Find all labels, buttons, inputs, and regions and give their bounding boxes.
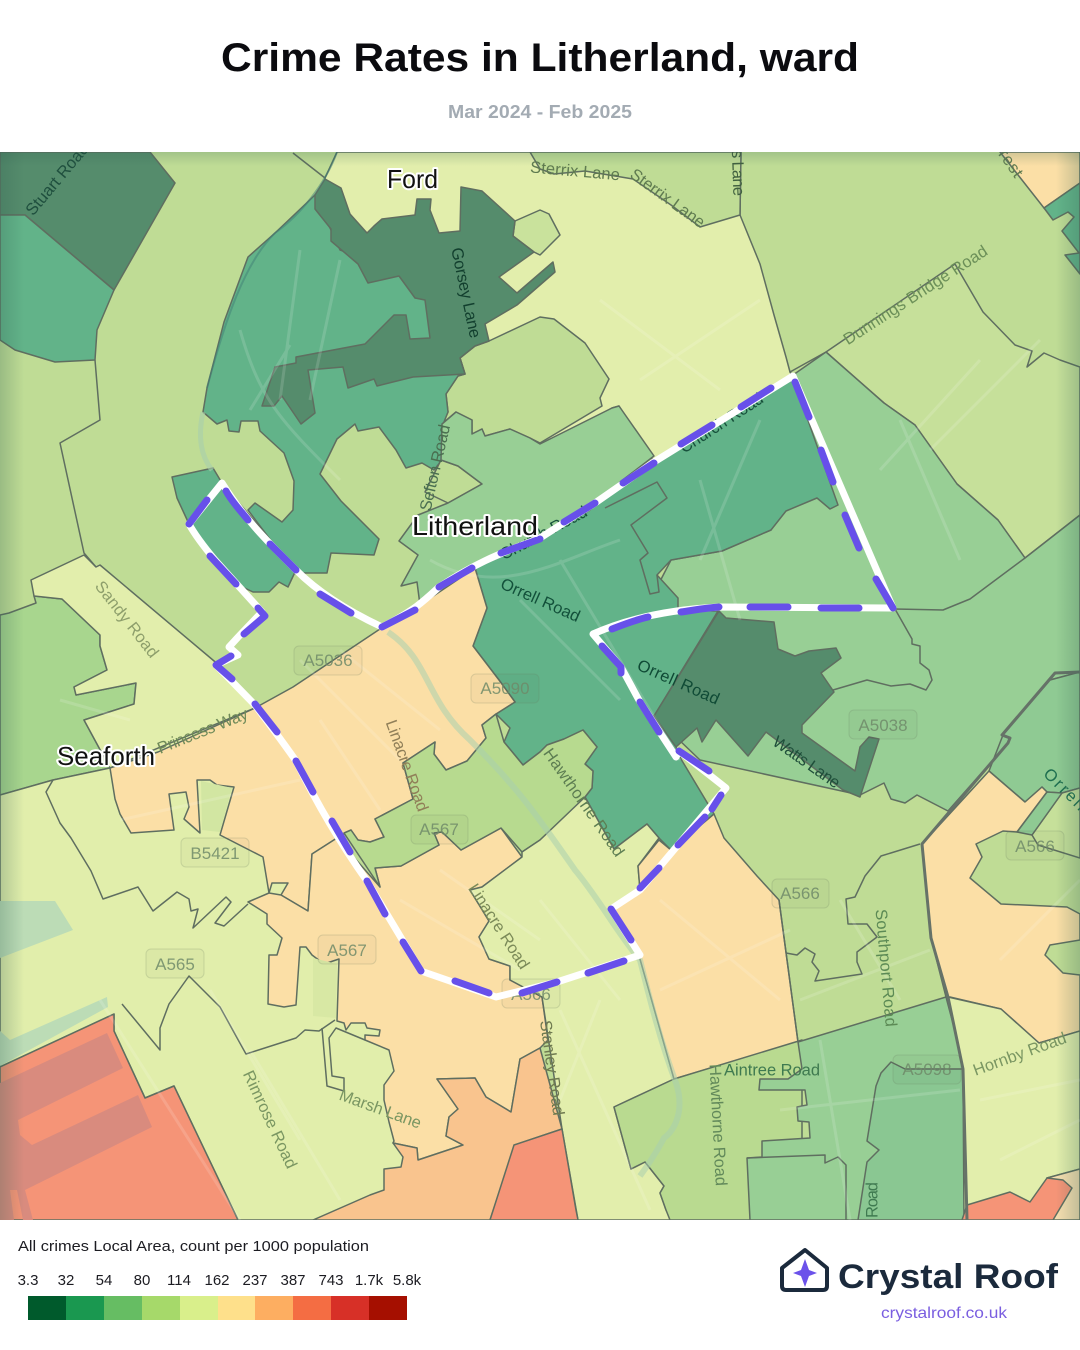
legend values: 1.7k [355,1272,384,1289]
region: top-left dark green [0,152,175,290]
place label: Ford: Ford [387,164,438,194]
road shields: A567 [419,820,459,839]
road labels: Road [863,1182,881,1218]
road shields: A566 [511,985,551,1004]
road shields: A566 [1015,837,1055,856]
road labels: Stuart Road [22,140,93,219]
road labels: rest [995,146,1027,181]
region: pale Hornby [948,997,1080,1220]
road labels: Orrell Road [498,575,583,626]
region: small teal wedge at ward north-west [172,468,296,592]
legend values [18,1272,422,1289]
region: light patch east of Gorsey Lane [442,317,609,443]
map edge vignette [0,152,1080,1220]
region: patch right of sliver [1032,788,1080,858]
legend values: 162 [204,1272,230,1289]
region: pale area north of ward [325,152,793,462]
boundary purple dashes [189,382,893,993]
region: mid green south [747,997,967,1220]
region: Orrell Road teal [473,378,838,850]
boundary lines [46,153,920,1091]
road labels: Marsh Lane [337,1086,424,1133]
logo wordmark: Crystal Roof [838,1258,1059,1296]
region: patch in Seaforth [201,781,232,832]
road shields: A566 [780,884,820,903]
region: east tan [922,771,1080,1043]
road labels: Orrell Road [634,656,722,709]
road labels: Sterrix Lane [529,158,621,184]
road labels: Rimrose Road [239,1068,300,1172]
legend values: 237 [242,1272,268,1289]
region: orange Bootle [313,1048,562,1220]
road labels: Hawthorne Road [705,1064,730,1186]
road labels: Linacre Road [464,881,533,973]
water: docks [0,901,108,1066]
region: south-west pale [0,708,440,1220]
road labels: Church Road [676,390,767,457]
legend values: 3.3 [18,1272,38,1289]
legend values: 54 [96,1272,112,1289]
ward boundary [189,376,893,997]
region: tan bottom-right corner [1040,1169,1080,1220]
road shields: A5038 [858,716,908,735]
road shields [146,646,1064,1084]
legend values: 32 [58,1272,74,1289]
legend colour scale [28,1296,407,1320]
A-road thick boundary [922,672,1080,1220]
legend values: 114 [167,1272,191,1289]
road shields: A5090 [480,679,530,698]
legend values: 5.8k [393,1272,422,1289]
region: tan north-east corner [1000,152,1080,208]
region: mid green south east block [858,1062,967,1220]
road labels: s Lane [728,150,747,196]
region: sliver by Sefton Road [425,460,482,503]
road shields: B5421 [190,844,240,863]
legend title: All crimes Local Area, count per 1000 population [18,1238,369,1255]
road labels: Hawthorne Road [539,745,628,860]
road labels: Watts Lane [769,733,843,792]
road labels: Southport Road [872,908,900,1028]
region: far east green [989,672,1080,802]
region: light green south of Aintree Road [614,1040,802,1220]
subtitle: date range: Mar 2024 - Feb 2025 [448,102,632,122]
region: red bottom centre [490,1129,578,1220]
logo: Crystal Roof [782,1250,1059,1322]
region: mid green block [747,1155,846,1220]
region: west mid green [0,596,136,795]
road labels: Hornby Road [971,1029,1069,1080]
region: pale south centre [470,797,674,1220]
port buildings [0,1033,152,1220]
river tail [200,412,212,470]
place label: Seaforth: Seaforth [57,741,155,771]
region: lighter green south-east of Dunnings Bridge Road [790,264,1080,558]
region: teal north-east edge [1044,183,1080,274]
map [0,140,1080,1220]
region: patch near A567 [313,958,337,1018]
road labels: Sefton Road [417,423,454,513]
region: tan Linacre north [110,568,515,911]
region: port red [0,1014,238,1220]
boundary white casing [189,376,893,997]
title: Crime Rates in Litherland, ward [221,36,859,80]
road labels: Gorsey Lane [447,246,484,340]
region: tan south-east of ward [612,814,798,1079]
road labels: Dunnings Bridge Road [840,242,991,349]
legend values: 80 [134,1272,150,1289]
road labels: Church Road [497,503,590,564]
place label: Litherland: Litherland [412,511,538,541]
legend values: 743 [318,1272,344,1289]
region: Litherland north teal [203,195,465,574]
teal inner outline [605,482,667,594]
faint streets [60,250,1080,1220]
region: tan Linacre south [248,828,548,1160]
road shields: A567 [327,941,367,960]
region: sliver east [1017,792,1062,835]
region: red south-east [962,1178,1072,1220]
logo url: crystalroof.co.uk [881,1305,1008,1322]
region: east mid green [640,352,1080,811]
road labels: Aintree Road [724,1061,820,1079]
region: Sandy Road pale strip [31,555,255,768]
road labels: Sandy Road [91,578,162,661]
region: light green north-east of Sterrix Lane [530,152,741,227]
legend [18,1238,422,1320]
legend values: 387 [280,1272,306,1289]
region: Gorsey Lane dark green [262,179,555,424]
road labels [22,140,1080,1218]
region: top-left teal [0,215,114,362]
icon: house with star [782,1250,827,1290]
road labels: Stanley Road [536,1019,567,1117]
road labels: Linacre Road [382,718,431,814]
region: light green Linacre middle [344,714,597,887]
road labels: Princess Way [155,705,251,758]
road labels: Sterrix Lane [626,165,708,232]
road shields: A5036 [303,651,353,670]
river [207,152,337,388]
canal [388,632,679,1176]
road shields: A5098 [902,1060,952,1079]
region: Orrell dark green [654,611,879,797]
east internal boundary [833,558,1025,690]
region: Litherland centre mid green [399,406,654,605]
road shields: A565 [155,955,195,974]
